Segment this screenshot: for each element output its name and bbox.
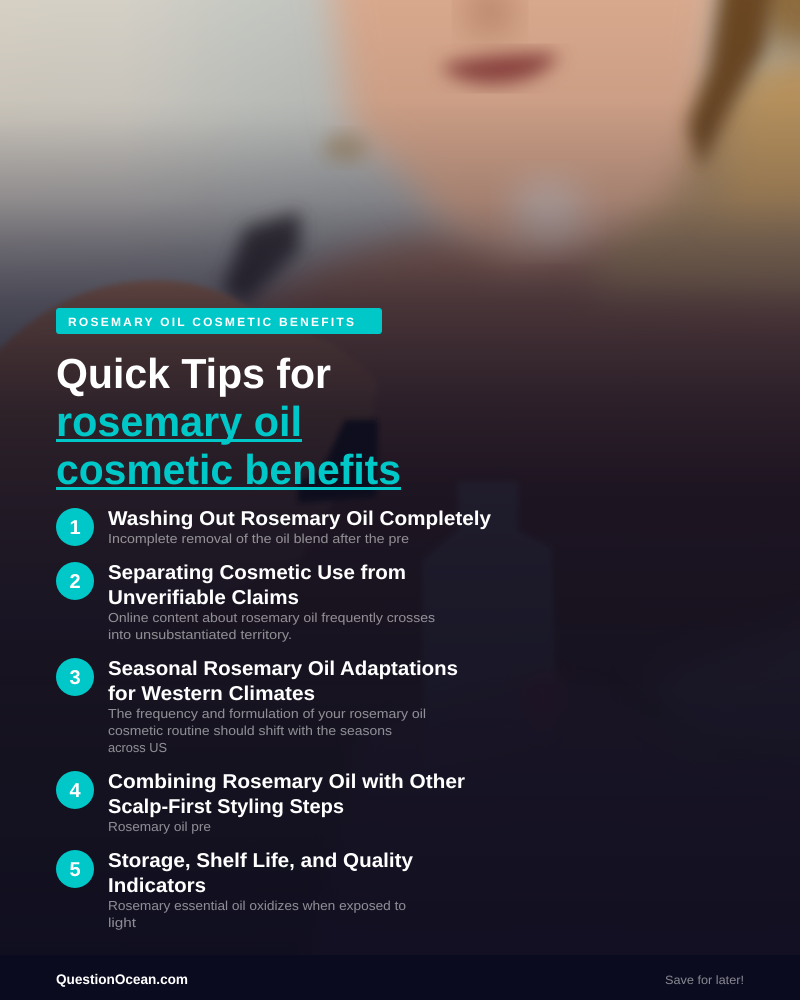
lips xyxy=(440,53,560,84)
tip 1: Washing Out Rosemary Oil Completely xyxy=(108,508,492,530)
tip 5: Indicators xyxy=(108,875,206,897)
number badge 4: 4 xyxy=(69,780,81,802)
number badge 5: 5 xyxy=(69,859,81,881)
tip 1: Incomplete removal of the oil blend after the pre xyxy=(108,531,409,546)
title: rosemary oil xyxy=(56,398,302,445)
title xyxy=(56,350,401,493)
dropper xyxy=(298,420,378,503)
tip 4: Combining Rosemary Oil with Other xyxy=(108,771,465,793)
footer bar xyxy=(0,955,800,1000)
number badge 3: 3 xyxy=(69,667,81,689)
footer bar: QuestionOcean.com xyxy=(56,971,188,987)
number badge 1: 1 xyxy=(69,517,81,539)
category badge: ROSEMARY OIL COSMETIC BENEFITS xyxy=(68,315,354,329)
tip 2: Online content about rosemary oil frequently crosses xyxy=(108,610,436,625)
lower hand and nails xyxy=(300,675,800,1000)
holding hand xyxy=(0,280,378,640)
dark collar xyxy=(222,212,300,305)
number badge 2: 2 xyxy=(69,571,81,593)
tip 2: Unverifiable Claims xyxy=(108,587,299,609)
tip 1 xyxy=(56,508,492,546)
tip 3 xyxy=(56,658,458,755)
tip 2 xyxy=(56,562,436,642)
hair xyxy=(720,30,800,215)
title: Quick Tips for xyxy=(56,350,331,397)
number badge 4 xyxy=(56,771,94,809)
number badge 2 xyxy=(56,562,94,600)
tip 2: into unsubstantiated territory. xyxy=(108,627,292,642)
tip 5: light xyxy=(108,915,136,930)
face xyxy=(325,0,725,262)
tip 5 xyxy=(56,850,414,930)
tip 4 xyxy=(56,771,465,834)
number badge 3 xyxy=(56,658,94,696)
tip 4: Rosemary oil pre xyxy=(108,819,211,834)
right shoulder and neck skin xyxy=(590,90,800,300)
tip 5: Rosemary essential oil oxidizes when exposed to xyxy=(108,898,406,913)
number badge 5 xyxy=(56,850,94,888)
unblurred base for lower body xyxy=(0,270,800,1000)
tip 3: cosmetic routine should shift with the seasons xyxy=(108,723,393,738)
category badge xyxy=(56,308,382,334)
tip 3: The frequency and formulation of your rosemary oil xyxy=(108,706,426,721)
tip 2: Separating Cosmetic Use from xyxy=(108,562,406,584)
nose shadow xyxy=(466,0,514,36)
tip 3: for Western Climates xyxy=(108,683,315,705)
tip 3: across US xyxy=(108,740,167,755)
tip 3: Seasonal Rosemary Oil Adaptations xyxy=(108,658,458,680)
tip 4: Scalp-First Styling Steps xyxy=(108,796,344,818)
chin highlight xyxy=(512,180,584,244)
title: cosmetic benefits xyxy=(56,446,401,493)
ear curl xyxy=(323,134,367,162)
tip 5: Storage, Shelf Life, and Quality xyxy=(108,850,414,872)
footer bar: Save for later! xyxy=(665,973,744,987)
number badge 1 xyxy=(56,508,94,546)
bottle neck and body xyxy=(422,482,556,770)
